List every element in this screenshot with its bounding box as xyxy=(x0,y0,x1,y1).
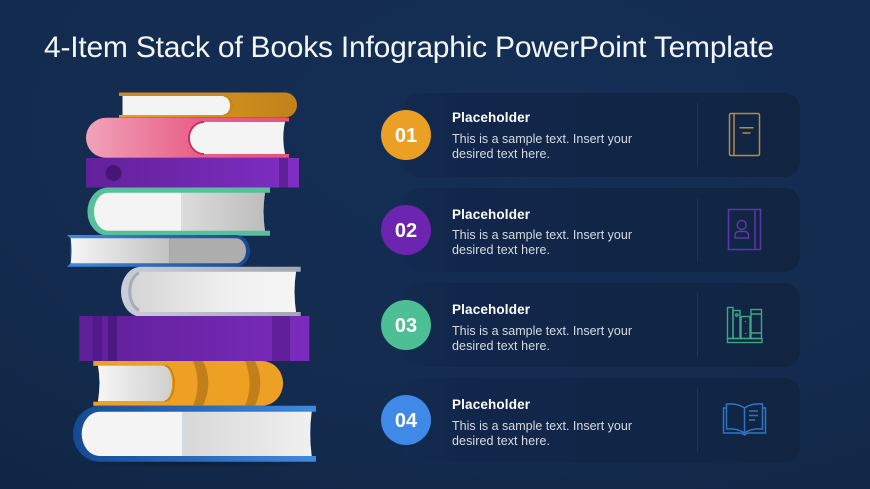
panel 4 text: desired text here. xyxy=(452,434,550,448)
badge 02: 02 xyxy=(395,220,417,242)
panel 4 background xyxy=(403,378,800,462)
panel 4 text: Placeholder xyxy=(452,397,531,412)
badge 01 xyxy=(381,110,431,160)
panel 3 text: This is a sample text. Insert your xyxy=(452,324,632,338)
panel 2 text xyxy=(452,207,632,257)
badge 03: 03 xyxy=(395,315,417,337)
panel 1 text: Placeholder xyxy=(452,110,531,125)
panel 1 text xyxy=(452,110,632,161)
panel 4 text xyxy=(452,397,632,448)
book 1: orange top book xyxy=(119,92,297,118)
panel 4 text: This is a sample text. Insert your xyxy=(452,419,632,433)
panel 3 background xyxy=(403,283,800,367)
book 6: grey book xyxy=(121,267,301,317)
panel 2 text: Placeholder xyxy=(452,207,531,222)
book 7: large purple book xyxy=(79,316,309,361)
book 9: large blue bottom book xyxy=(73,406,316,462)
illustration: stack of books xyxy=(67,92,320,469)
book 4: green book xyxy=(87,188,270,236)
icon: bookshelf xyxy=(728,308,762,342)
icon: address book xyxy=(728,210,760,250)
panel 1 background xyxy=(403,93,800,177)
badge 02 xyxy=(381,205,431,255)
book 8: orange book with bands xyxy=(93,361,283,406)
panel 1 text: desired text here. xyxy=(452,147,550,161)
book 5: blue thin book xyxy=(67,235,250,267)
panel 4 xyxy=(381,378,800,462)
title: 4-Item Stack of Books Infographic PowerPoint Template xyxy=(44,31,774,64)
badge 01: 01 xyxy=(395,125,417,147)
panel 1 xyxy=(381,93,800,177)
shadow under stack xyxy=(70,457,320,469)
panel 3 xyxy=(381,283,800,367)
badge 03 xyxy=(381,300,431,350)
divider xyxy=(697,293,698,357)
panel 1 text: This is a sample text. Insert your xyxy=(452,132,632,146)
panel 2 text: desired text here. xyxy=(452,243,550,257)
badge 04 xyxy=(381,395,431,445)
panel 3 text: Placeholder xyxy=(452,302,531,317)
panel 2 text: This is a sample text. Insert your xyxy=(452,228,632,242)
icon: closed book xyxy=(730,114,760,156)
icon: open book xyxy=(724,404,766,435)
panel 3 text xyxy=(452,302,632,353)
divider xyxy=(697,198,698,262)
divider xyxy=(697,103,698,167)
book 2: pink book xyxy=(86,118,289,158)
panel 2 xyxy=(381,188,800,272)
panel 2 background xyxy=(403,188,800,272)
book 3: purple book with dot xyxy=(86,158,299,188)
badge 04: 04 xyxy=(395,410,418,432)
divider xyxy=(697,388,698,452)
panel 3 text: desired text here. xyxy=(452,339,550,353)
